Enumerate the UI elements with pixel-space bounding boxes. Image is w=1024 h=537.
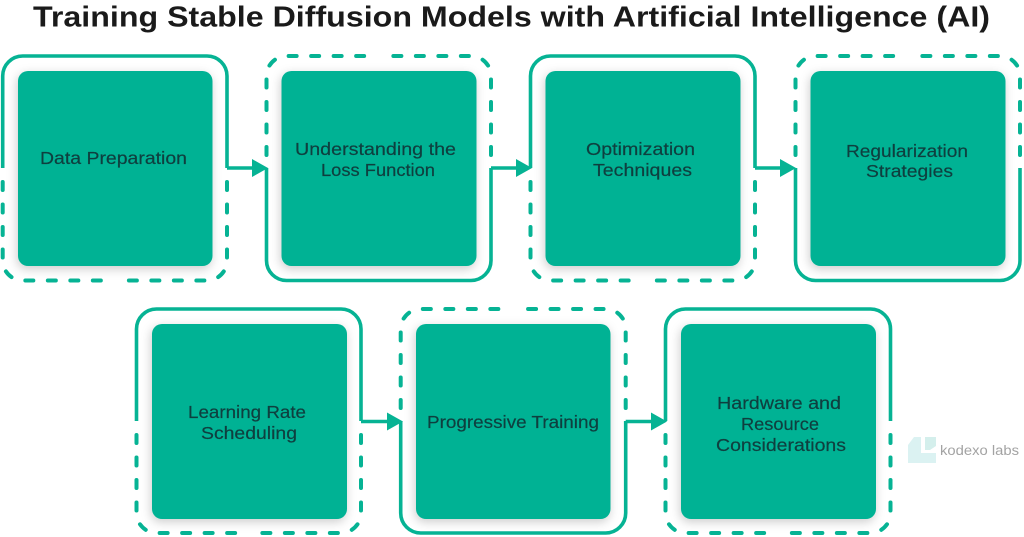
- panel: Optimization Techniques: [530, 56, 755, 280]
- panel: Learning Rate Scheduling: [136, 309, 361, 533]
- panel: Progressive Training: Progressive Training: [427, 412, 599, 432]
- panel: Optimization Techniques: Techniques: [593, 160, 692, 180]
- panel: Understanding the Loss Function: [266, 56, 491, 280]
- panel: Hardware and Resource Considerations: Considerations: [716, 435, 846, 455]
- arrow: Optimization to Regularization: [755, 159, 796, 177]
- panel: Understanding the Loss Function: Loss Function: [321, 160, 435, 180]
- panel: Regularization Strategies: [796, 56, 1020, 280]
- panel: Data Preparation: [3, 56, 227, 280]
- panel: Regularization Strategies: Strategies: [866, 161, 953, 181]
- logo: kodexo labs: kodexo labs: [940, 443, 1019, 458]
- panel: Data Preparation: Data Preparation: [40, 148, 187, 168]
- panel: Hardware and Resource Considerations: Resource: [741, 414, 819, 434]
- title: Training Stable Diffusion Models with Artificial Intelligence (AI): [33, 2, 990, 34]
- panel: Learning Rate Scheduling: Scheduling: [201, 423, 297, 443]
- logo: kodexo labs: [908, 437, 1019, 463]
- panel: Progressive Training: [401, 309, 626, 533]
- panel: Hardware and Resource Considerations: Hardware and: [717, 393, 841, 413]
- arrow: Progressive Training to Hardware: [626, 412, 667, 430]
- panel: Regularization Strategies: Regularization: [846, 141, 968, 161]
- panel: Learning Rate Scheduling: Learning Rate: [188, 402, 306, 422]
- arrow: Data Preparation to Loss Function: [227, 159, 268, 177]
- arrow: Learning Rate to Progressive Training: [361, 412, 403, 430]
- panel: Hardware and Resource Considerations: [666, 309, 890, 533]
- arrow: Loss Function to Optimization: [491, 159, 532, 177]
- panel: Optimization Techniques: Optimization: [586, 139, 695, 159]
- panel: Understanding the Loss Function: Understanding the: [295, 139, 456, 159]
